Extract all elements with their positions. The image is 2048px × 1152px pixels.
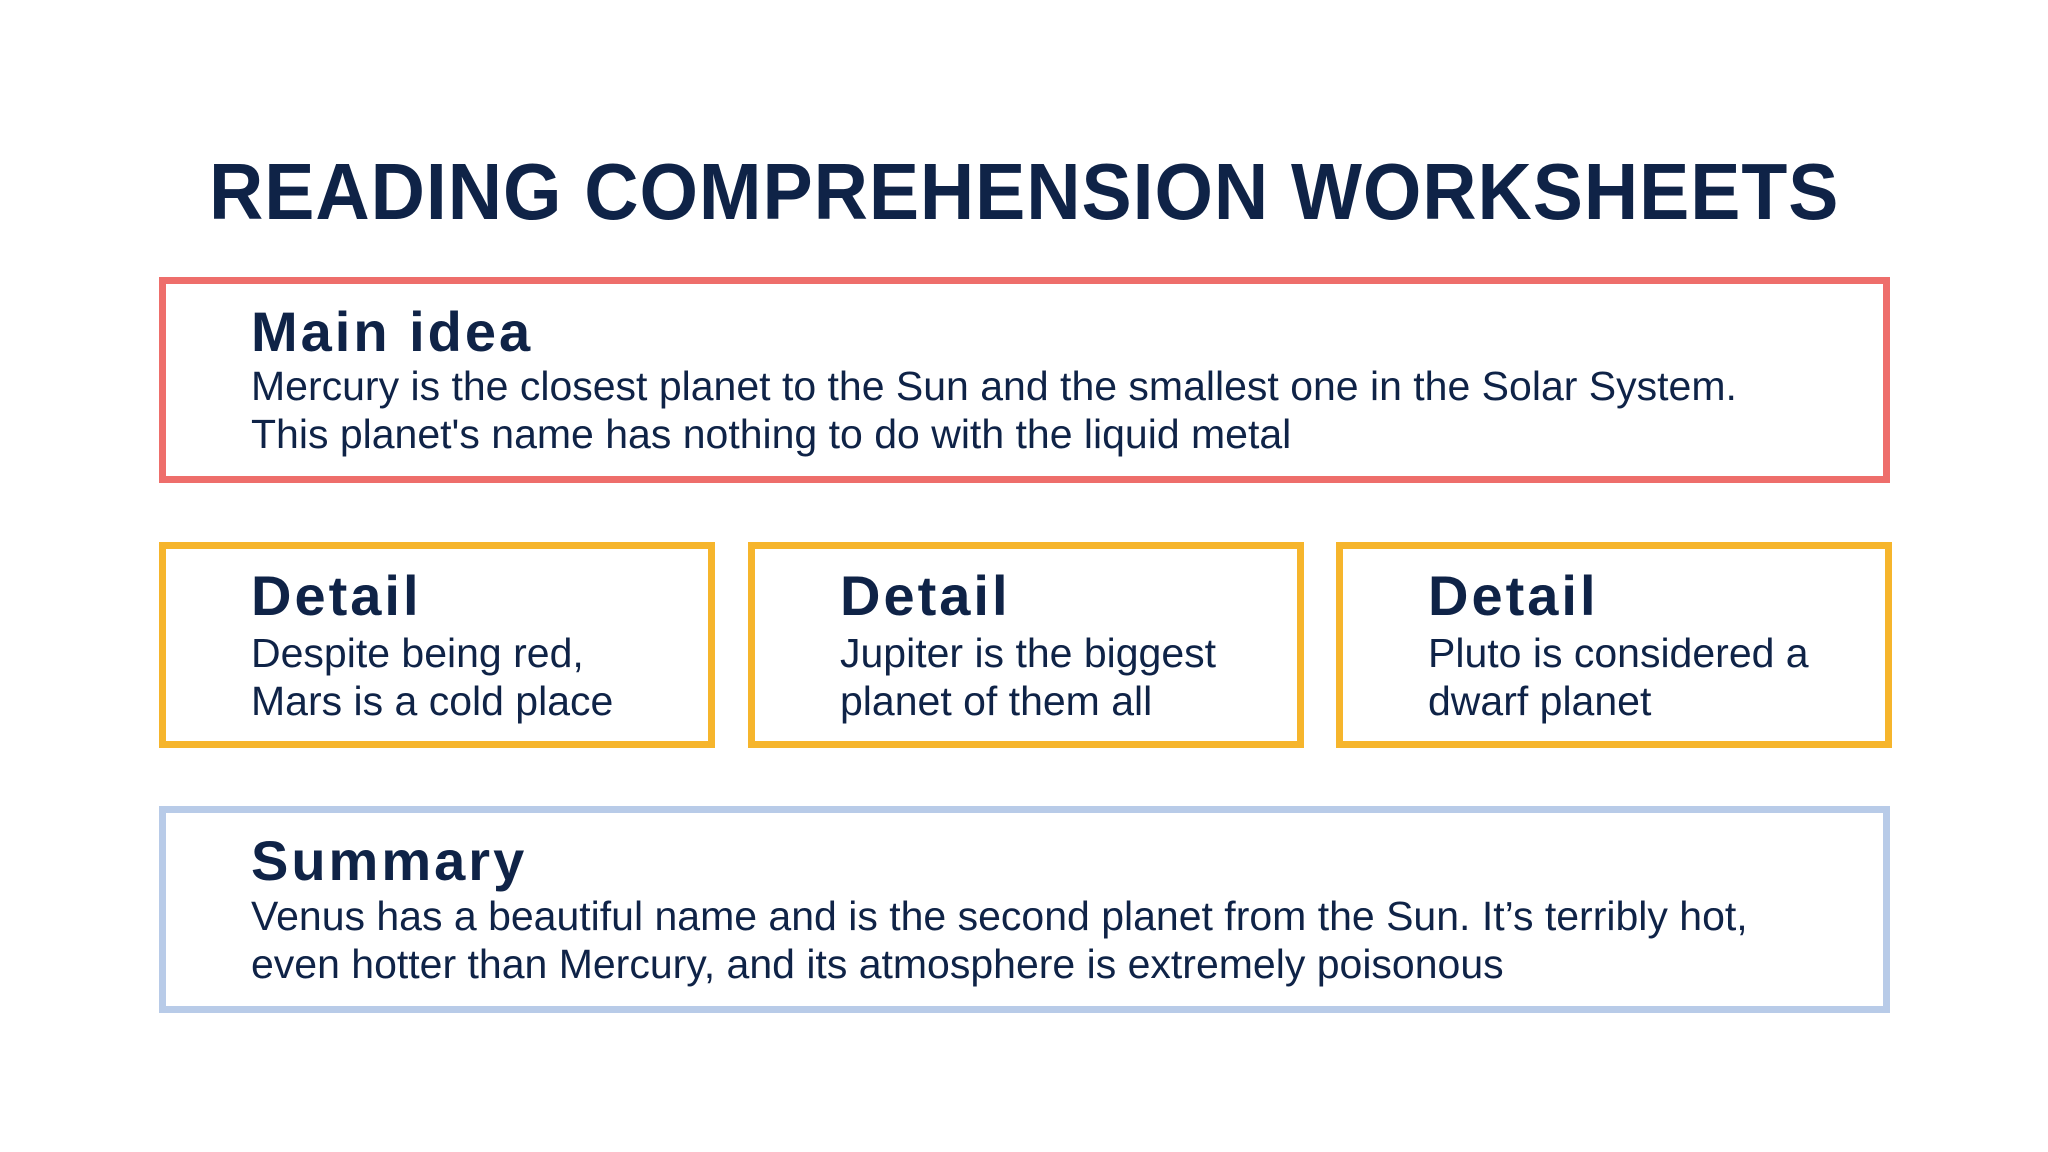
- heading: main idea: Main idea: [251, 300, 533, 363]
- panel: main idea: [159, 277, 1890, 483]
- text: detail 1: Despite being red,: [251, 630, 584, 676]
- text: detail 1: Mars is a cold place: [251, 678, 613, 724]
- heading: summary: Summary: [251, 829, 527, 892]
- panel: detail 3: [1336, 542, 1892, 748]
- heading: detail 2: Detail: [840, 564, 1010, 627]
- title: READING COMPREHENSION WORKSHEETS: [209, 147, 1839, 236]
- text: summary: Venus has a beautiful name and is the second planet from the Sun. It’s terribly hot,: [251, 893, 1748, 939]
- heading: detail 1: Detail: [251, 564, 422, 627]
- text: detail 3: dwarf planet: [1428, 678, 1651, 724]
- text: detail 2: Jupiter is the biggest: [840, 630, 1216, 676]
- text: summary: even hotter than Mercury, and its atmosphere is extremely poisonous: [251, 941, 1504, 987]
- panel: summary: [159, 806, 1890, 1013]
- text: main idea: [251, 363, 1737, 457]
- panel: detail 1: [159, 542, 715, 748]
- text: summary: [251, 893, 1748, 987]
- text: main idea: This planet's name has nothing to do with the liquid metal: [251, 411, 1291, 457]
- text: detail 3: Pluto is considered a: [1428, 630, 1809, 676]
- text: main idea: Mercury is the closest planet to the Sun and the smallest one in the Solar System.: [251, 363, 1737, 409]
- text: detail 2: planet of them all: [840, 678, 1152, 724]
- heading: detail 3: Detail: [1428, 564, 1598, 627]
- text: detail 1: [251, 630, 613, 724]
- text: detail 3: [1428, 630, 1809, 724]
- text: detail 2: [840, 630, 1216, 724]
- panel: detail 2: [748, 542, 1304, 748]
